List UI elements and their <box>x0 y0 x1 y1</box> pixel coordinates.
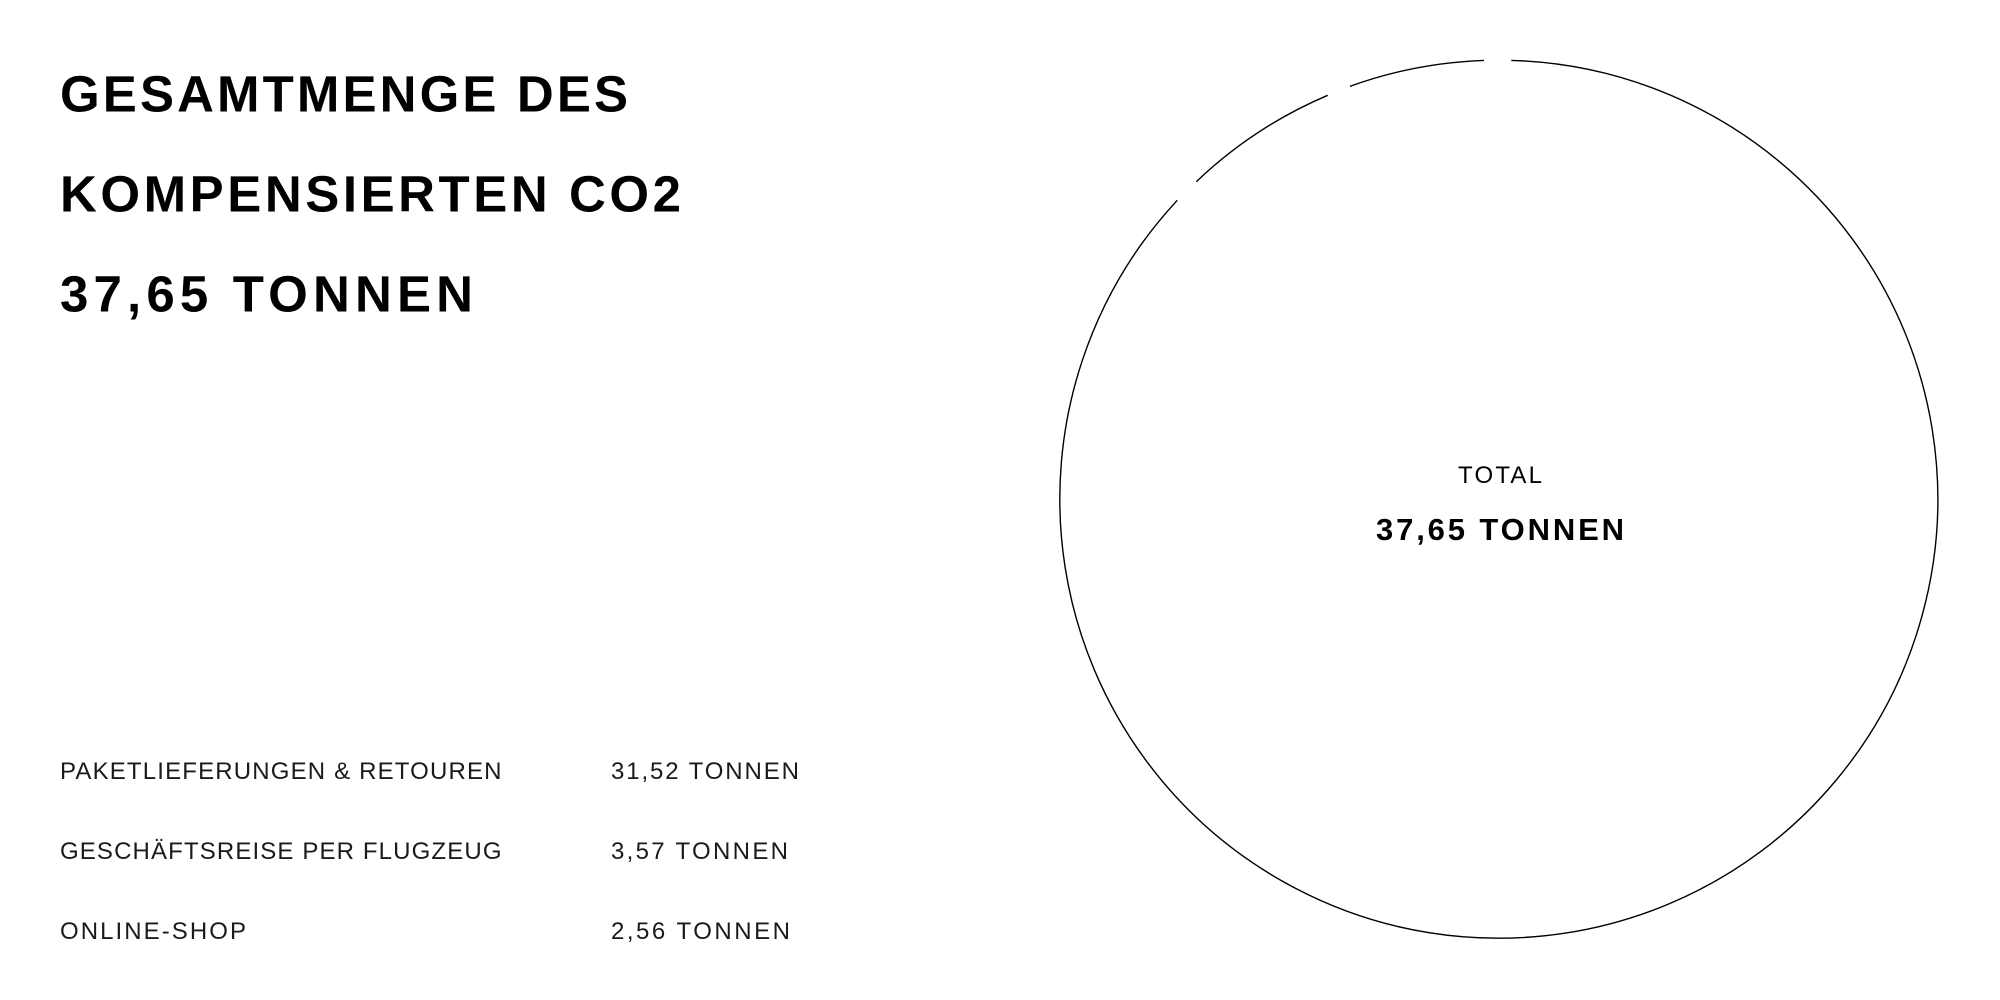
center label <box>1376 462 1624 547</box>
row: Online-Shop: 2,56 TONNEN <box>611 918 790 945</box>
title: KOMPENSIERTEN CO2 <box>60 166 681 222</box>
row: Online-Shop: ONLINE-SHOP <box>60 918 246 945</box>
row: Paketlieferungen <box>60 758 799 785</box>
segment: Geschäftsreise <box>1196 95 1328 182</box>
center label: TOTAL <box>1458 462 1542 489</box>
row: Online-Shop <box>60 918 790 945</box>
row: Paketlieferungen: 31,52 TONNEN <box>611 758 799 785</box>
pie chart ring <box>1060 60 1938 938</box>
title: 37,65 TONNEN <box>60 266 473 322</box>
row: Geschäftsreise: 3,57 TONNEN <box>611 838 788 865</box>
title: GESAMTMENGE DES <box>60 66 628 122</box>
segment: Paketlieferungen <box>1060 60 1938 938</box>
row: Geschäftsreise <box>60 838 788 865</box>
segment: Online-Shop <box>1350 60 1484 86</box>
row: Paketlieferungen: PAKETLIEFERUNGEN & RETOUREN <box>60 758 502 785</box>
legend table <box>60 758 799 945</box>
title <box>60 66 681 322</box>
row: Geschäftsreise: GESCHÄFTSREISE PER FLUGZEUG <box>60 838 502 865</box>
center label: 37,65 TONNEN <box>1376 512 1624 547</box>
